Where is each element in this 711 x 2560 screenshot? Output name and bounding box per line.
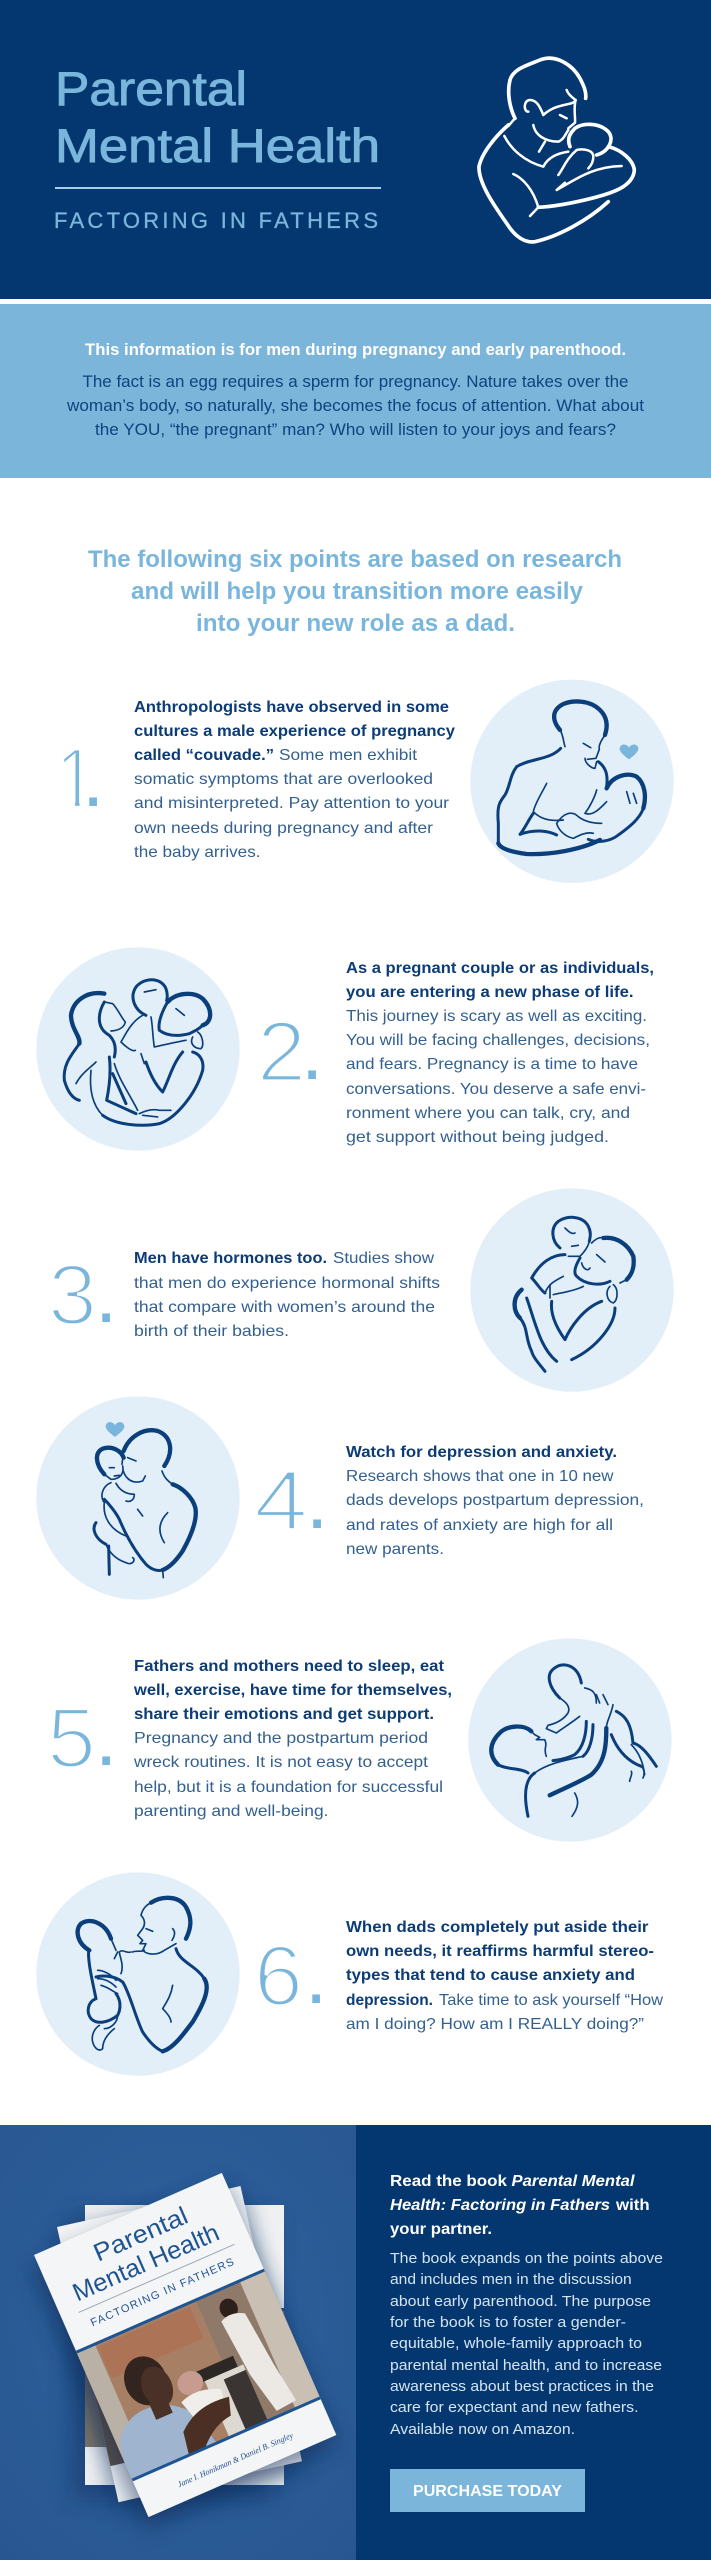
number 6: 6 xyxy=(254,1929,303,2024)
purchase text: for the book is to foster a gender- xyxy=(390,2314,626,2331)
point 2 text: You will be facing challenges, decisions, xyxy=(346,1032,650,1049)
title: Parental xyxy=(55,62,247,115)
point 6 text: own needs, it reaffirms harmful stereo- xyxy=(346,1943,654,1960)
point 5 text: wreck routines. It is not easy to accept xyxy=(133,1754,429,1771)
number 4: . xyxy=(306,1456,328,1545)
purchase heading: Parental Mental xyxy=(512,2173,635,2190)
point 1 text xyxy=(134,699,455,861)
number 6: . xyxy=(305,1931,327,2020)
intro text xyxy=(66,372,644,439)
point 2 text: This journey is scary as well as exciting. xyxy=(346,1008,647,1025)
number 6 xyxy=(254,1929,327,2024)
point 1 text: own needs during pregnancy and after xyxy=(134,820,434,837)
point 4 text: dads develops postpartum depression, xyxy=(346,1492,644,1509)
purchase heading xyxy=(390,2173,650,2238)
number 1: . xyxy=(82,734,104,823)
number 5: . xyxy=(95,1693,117,1782)
point 1 text: Anthropologists have observed in some xyxy=(134,699,449,716)
point 5 text: parenting and well-being. xyxy=(134,1803,328,1820)
point 4 text: new parents. xyxy=(346,1541,444,1558)
purchase heading: with xyxy=(615,2197,650,2214)
point 3 text: Men have hormones too. xyxy=(134,1250,327,1267)
point 2 text: get support without being judged. xyxy=(346,1129,609,1146)
purchase button: PURCHASE TODAY xyxy=(413,2483,562,2500)
intro panel: This information is for men during pregnancy and early parenthood. xyxy=(85,341,626,359)
number 4: 4 xyxy=(254,1454,308,1549)
number 5 xyxy=(47,1691,117,1786)
number 4 xyxy=(254,1454,328,1549)
illustration: father holding infant up xyxy=(36,1872,240,2076)
illustration: father lifting baby xyxy=(468,1638,672,1842)
point 5 text: well, exercise, have time for themselves, xyxy=(133,1682,452,1699)
point 2 text: As a pregnant couple or as individuals, xyxy=(346,960,654,977)
title: Mental Health xyxy=(55,119,380,172)
point 5 text: share their emotions and get support. xyxy=(134,1706,434,1723)
purchase text: Available now on Amazon. xyxy=(390,2421,575,2438)
point 2 text xyxy=(346,960,654,1146)
number 3: . xyxy=(95,1250,117,1339)
purchase heading: your partner. xyxy=(390,2221,492,2238)
point 6 text: types that tend to cause anxiety and xyxy=(346,1967,635,1984)
intro text: woman’s body, so naturally, she becomes the focus of attention. What about xyxy=(66,396,644,415)
purchase text: The book expands on the points above xyxy=(390,2250,663,2267)
point 3 text: birth of their babies. xyxy=(134,1323,289,1340)
section heading: The following six points are based on research xyxy=(88,546,622,573)
point 2 text: you are entering a new phase of life. xyxy=(346,984,634,1001)
subtitle: FACTORING IN FATHERS xyxy=(54,208,378,233)
point 6 xyxy=(36,1872,663,2076)
number 5: 5 xyxy=(47,1691,96,1786)
point 4 xyxy=(36,1396,644,1600)
purchase text: care for expectant and new fathers. xyxy=(390,2399,638,2416)
point 1 text: and misinterpreted. Pay attention to your xyxy=(134,795,450,812)
illustration: father kissing toddler xyxy=(470,1188,674,1392)
point 4 text: and rates of anxiety are high for all xyxy=(346,1517,613,1534)
point 3 text: Studies show xyxy=(333,1250,434,1267)
purchase text: and includes men in the discussion xyxy=(390,2271,632,2288)
book title: Mental Health xyxy=(68,2219,224,2307)
book title: FACTORING IN FATHERS xyxy=(89,2256,236,2329)
book authors: Jane I. Honikman & Daniel B. Singley xyxy=(176,2430,295,2489)
purchase panel xyxy=(356,2125,711,2560)
point 6 text: depression. xyxy=(346,1992,433,2009)
point 2 text: conversations. You deserve a safe envi- xyxy=(346,1081,646,1098)
purchase heading: Health: Factoring in Fathers xyxy=(390,2197,610,2214)
point 5 xyxy=(47,1638,672,1842)
book title: Parental xyxy=(89,2202,192,2267)
section heading xyxy=(88,546,622,637)
purchase text: about early parenthood. The purpose xyxy=(390,2293,651,2310)
section heading: and will help you transition more easily xyxy=(131,578,584,605)
point 3 text: that compare with women’s around the xyxy=(134,1299,435,1316)
purchase text: parental mental health, and to increase xyxy=(390,2357,662,2374)
book title xyxy=(57,2192,236,2331)
point 5 text xyxy=(133,1658,452,1820)
point 4 text: Research shows that one in 10 new xyxy=(346,1468,614,1485)
point 3 text: that men do experience hormonal shifts xyxy=(134,1275,440,1292)
number 2: . xyxy=(301,1007,323,1096)
number 3 xyxy=(48,1248,117,1343)
book panel xyxy=(0,2125,356,2560)
point 6 text: am I doing? How am I REALLY doing?” xyxy=(346,2016,644,2033)
point 6 text xyxy=(346,1919,663,2033)
point 1 text: called “couvade.” xyxy=(134,747,274,764)
point 2 text: ronment where you can talk, cry, and xyxy=(346,1105,630,1122)
section heading: into your new role as a dad. xyxy=(196,610,515,637)
point 4 text xyxy=(346,1444,644,1558)
intro text: The fact is an egg requires a sperm for pregnancy. Nature takes over the xyxy=(82,372,628,391)
illustration: couple with child xyxy=(36,947,240,1151)
point 2 text: and fears. Pregnancy is a time to have xyxy=(346,1056,638,1073)
point 1 text: Some men exhibit xyxy=(279,747,418,764)
purchase button xyxy=(390,2469,585,2512)
point 3 text xyxy=(134,1250,440,1340)
title xyxy=(55,62,380,172)
book cover xyxy=(30,2173,336,2519)
number 2: 2 xyxy=(257,1005,306,1100)
point 1 xyxy=(55,680,674,883)
number 1: 1 xyxy=(56,732,96,827)
purchase heading: Read the book xyxy=(390,2173,507,2190)
book stack xyxy=(27,2173,340,2529)
purchase text xyxy=(390,2250,663,2438)
intro panel xyxy=(0,304,711,478)
intro text: the YOU, “the pregnant” man? Who will listen to your joys and fears? xyxy=(95,420,616,439)
icon: father cradling baby xyxy=(479,58,634,242)
point 6 text: When dads completely put aside their xyxy=(346,1919,648,1936)
point 2 xyxy=(36,947,654,1151)
illustration: father nursing baby xyxy=(470,680,674,883)
point 1 text: somatic symptoms that are overlooked xyxy=(134,771,433,788)
purchase text: equitable, whole-family approach to xyxy=(390,2335,642,2352)
point 4 text: Watch for depression and anxiety. xyxy=(346,1444,617,1461)
header panel xyxy=(0,0,711,299)
point 5 text: Fathers and mothers need to sleep, eat xyxy=(134,1658,445,1675)
point 1 text: cultures a male experience of pregnancy xyxy=(134,723,455,740)
point 5 text: Pregnancy and the postpartum period xyxy=(134,1730,428,1747)
point 3 xyxy=(48,1188,674,1392)
number 3: 3 xyxy=(48,1248,97,1343)
point 1 text: the baby arrives. xyxy=(134,844,260,861)
purchase text: awareness about best practices in the xyxy=(390,2378,654,2395)
illustration: father holding newborn xyxy=(36,1396,240,1600)
point 5 text: help, but it is a foundation for successful xyxy=(134,1779,443,1796)
point 6 text: Take time to ask yourself “How xyxy=(439,1992,663,2009)
